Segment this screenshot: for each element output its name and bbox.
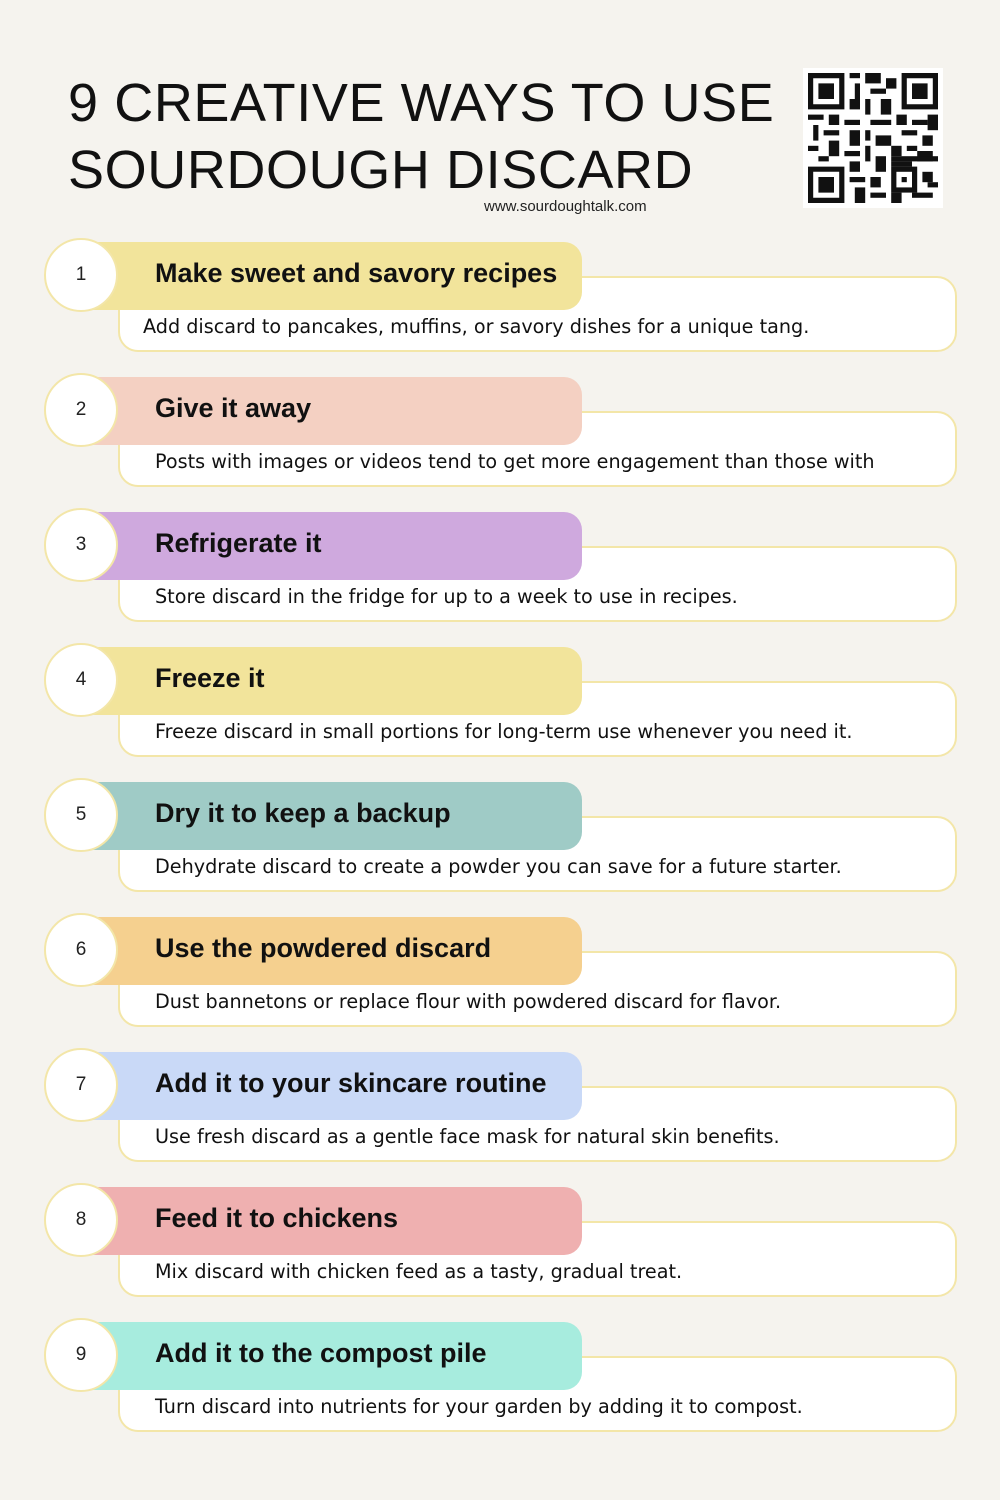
description 6: Dust bannetons or replace flour with powdered discard for flavor. xyxy=(155,990,781,1013)
number circle 7 xyxy=(44,1048,118,1122)
title bar 7 xyxy=(62,1052,582,1120)
number circle 8 xyxy=(44,1183,118,1257)
heading 9: Add it to the compost pile xyxy=(155,1338,486,1368)
heading 3: Refrigerate it xyxy=(155,528,322,558)
number circle 9: 9 xyxy=(76,1344,86,1365)
description 4: Freeze discard in small portions for long-term use whenever you need it. xyxy=(155,720,852,743)
item 5 xyxy=(44,778,957,892)
item 7 xyxy=(44,1048,957,1162)
description 8: Mix discard with chicken feed as a tasty, gradual treat. xyxy=(155,1260,682,1283)
number circle 1 xyxy=(44,238,118,312)
item 3 xyxy=(44,508,957,622)
description 2: Posts with images or videos tend to get more engagement than those with xyxy=(155,450,875,473)
description box 8 xyxy=(118,1221,957,1297)
heading 8: Feed it to chickens xyxy=(155,1203,398,1233)
item 2 xyxy=(44,373,957,487)
number circle 8: 8 xyxy=(76,1209,86,1230)
heading 7: Add it to your skincare routine xyxy=(155,1068,547,1098)
qr code xyxy=(803,68,943,208)
item 1 xyxy=(44,238,957,352)
title bar 4 xyxy=(62,647,582,715)
title bar 5 xyxy=(62,782,582,850)
title bar 8 xyxy=(62,1187,582,1255)
number circle 1: 1 xyxy=(76,264,86,285)
number circle 7: 7 xyxy=(76,1074,86,1095)
description box 9 xyxy=(118,1356,957,1432)
heading 4: Freeze it xyxy=(155,663,265,693)
number circle 3: 3 xyxy=(76,534,86,555)
number circle 6: 6 xyxy=(76,939,86,960)
number circle 4 xyxy=(44,643,118,717)
description box 4 xyxy=(118,681,957,757)
heading 6: Use the powdered discard xyxy=(155,933,491,963)
title bar 1 xyxy=(62,242,582,310)
description box 3 xyxy=(118,546,957,622)
item 4 xyxy=(44,643,957,757)
title: SOURDOUGH DISCARD xyxy=(68,140,693,200)
number circle 4: 4 xyxy=(76,669,86,690)
number circle 6 xyxy=(44,913,118,987)
title: 9 CREATIVE WAYS TO USE xyxy=(68,73,774,133)
description box 2 xyxy=(118,411,957,487)
number circle 9 xyxy=(44,1318,118,1392)
item 9 xyxy=(44,1318,957,1432)
heading 5: Dry it to keep a backup xyxy=(155,798,451,828)
item 6 xyxy=(44,913,957,1027)
heading 1: Make sweet and savory recipes xyxy=(155,258,557,288)
number circle 2: 2 xyxy=(76,399,86,420)
title bar 3 xyxy=(62,512,582,580)
number circle 3 xyxy=(44,508,118,582)
description box 7 xyxy=(118,1086,957,1162)
description 3: Store discard in the fridge for up to a week to use in recipes. xyxy=(155,585,738,608)
number circle 5: 5 xyxy=(76,804,86,825)
title bar 6 xyxy=(62,917,582,985)
description 7: Use fresh discard as a gentle face mask for natural skin benefits. xyxy=(155,1125,780,1148)
description 1: Add discard to pancakes, muffins, or savory dishes for a unique tang. xyxy=(143,315,809,338)
description 9: Turn discard into nutrients for your garden by adding it to compost. xyxy=(155,1395,803,1418)
number circle 2 xyxy=(44,373,118,447)
title bar 9 xyxy=(62,1322,582,1390)
title bar 2 xyxy=(62,377,582,445)
description box 1 xyxy=(118,276,957,352)
title xyxy=(68,73,774,200)
description 5: Dehydrate discard to create a powder you can save for a future starter. xyxy=(155,855,842,878)
heading 2: Give it away xyxy=(155,393,311,423)
item 8 xyxy=(44,1183,957,1297)
website url: www.sourdoughtalk.com xyxy=(484,198,647,215)
description box 5 xyxy=(118,816,957,892)
number circle 5 xyxy=(44,778,118,852)
description box 6 xyxy=(118,951,957,1027)
